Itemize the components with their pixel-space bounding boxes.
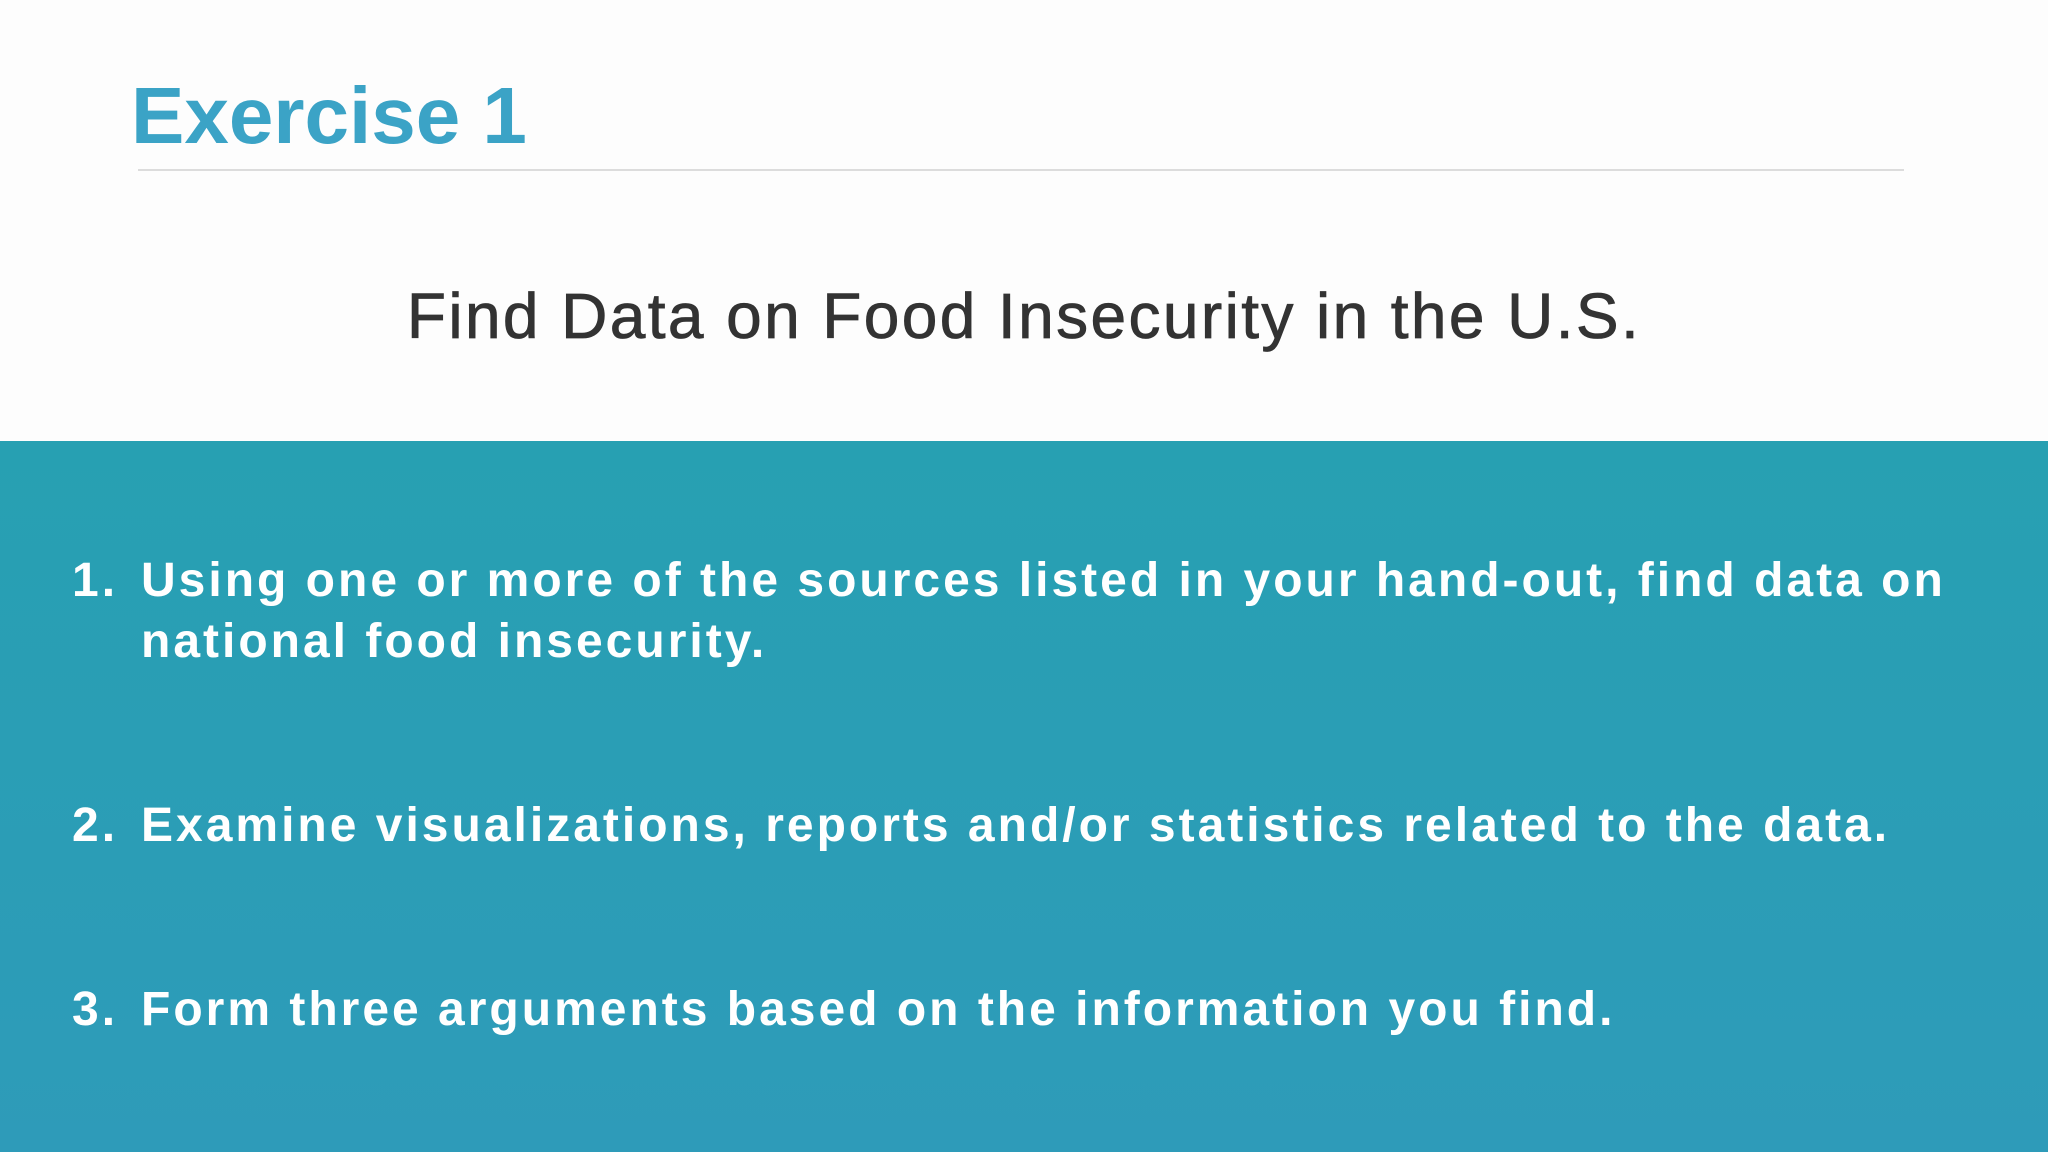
item 1: Using one or more of the sources listed in your hand-out, find data on: [141, 554, 1946, 607]
item 2: Examine visualizations, reports and/or statistics related to the data.: [141, 799, 1890, 852]
item 3: 3.: [72, 983, 118, 1036]
subtitle: Find Data on Food Insecurity in the U.S.: [407, 280, 1641, 352]
item 1: [72, 554, 1946, 668]
panel: instructions: [0, 441, 2048, 1152]
item 3: Form three arguments based on the information you find.: [141, 983, 1615, 1036]
item 1: 1.: [72, 554, 118, 607]
item 2: 2.: [72, 799, 118, 852]
title: Exercise 1: [131, 71, 527, 160]
item 1: national food insecurity.: [141, 615, 767, 668]
